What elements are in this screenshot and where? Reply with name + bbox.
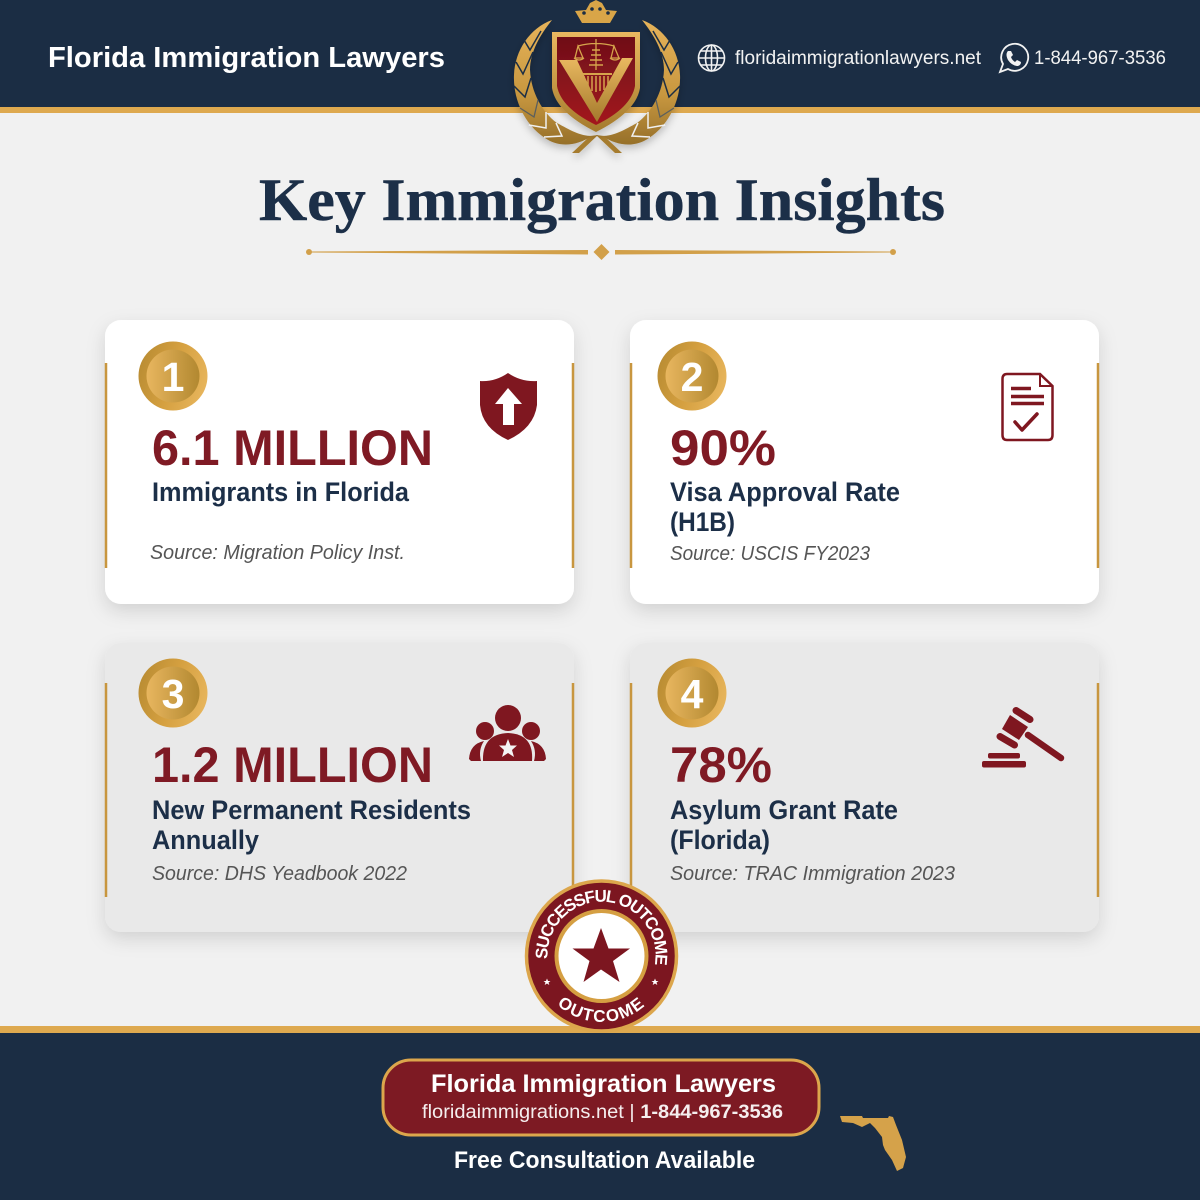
free consultation: Free Consultation Available: [454, 1147, 755, 1174]
label: (H1B): [670, 507, 735, 537]
icon: people with star: [469, 705, 546, 761]
footer bar: [0, 1026, 1200, 1200]
label: [152, 795, 471, 855]
arc text bottom: OUTCOME: [559, 997, 644, 1022]
label: Visa Approval Rate: [670, 477, 900, 507]
star: [572, 928, 630, 982]
medal 3: [138, 658, 208, 728]
label: (Florida): [670, 825, 770, 855]
crown: [575, 0, 617, 23]
panel: card 4 asylum grant: [630, 643, 1099, 932]
crest logo: [514, 0, 680, 153]
arc text top: SUCCESSFUL OUTCOME: [536, 890, 668, 965]
title: Key Immigration Insights: [259, 167, 945, 233]
icon: phone chat: [1000, 44, 1028, 72]
stat 78%: 78%: [670, 737, 772, 793]
phone number: 1-844-967-3536: [1034, 47, 1166, 69]
panel: card 1 immigrants: [105, 320, 574, 604]
source: Source: Migration Policy Inst.: [150, 542, 405, 564]
stat 6.1 million: 6.1 MILLION: [152, 420, 433, 476]
small stars: [544, 978, 658, 985]
medal 4: 4: [681, 671, 704, 717]
source: Source: TRAC Immigration 2023: [670, 863, 955, 885]
panel: card 2 visa approval: [630, 320, 1099, 604]
medal 1: [138, 342, 208, 410]
medal 1: 1: [162, 354, 184, 400]
scales and column: [574, 39, 620, 92]
label: Annually: [152, 825, 259, 855]
badge: successful outcome: [524, 879, 678, 1030]
stat 1.2 million: 1.2 MILLION: [152, 737, 433, 793]
icon: globe: [698, 45, 724, 71]
icon: shield with arrow: [480, 373, 537, 440]
icon: document with check: [1002, 374, 1052, 440]
pill firm name: Florida Immigration Lawyers: [431, 1070, 776, 1098]
panel: card 3 permanent residents: [105, 643, 574, 932]
pill contact line: floridaimmigrations.net | 1-844-967-3536: [422, 1102, 783, 1123]
source: Source: USCIS FY2023: [670, 543, 870, 565]
medal 4: [658, 658, 726, 728]
laurel wreath: [514, 20, 680, 153]
icon: gavel: [982, 710, 1061, 768]
icon: Florida map: [840, 1116, 906, 1171]
medal 2: 2: [681, 354, 703, 400]
header bar: [0, 0, 1200, 113]
stat 90%: 90%: [670, 420, 776, 476]
source: Source: DHS Yeadbook 2022: [152, 863, 407, 885]
chevron V: [559, 58, 633, 122]
footer contact pill: [383, 1060, 819, 1135]
label: [670, 795, 898, 855]
header firm name: Florida Immigration Lawyers: [48, 42, 445, 74]
label: [670, 477, 900, 537]
shield: [552, 32, 640, 132]
label: Asylum Grant Rate: [670, 795, 898, 825]
label: New Permanent Residents: [152, 795, 471, 825]
medal 3: 3: [162, 671, 184, 717]
medal 2: [658, 342, 726, 410]
label: Immigrants in Florida: [152, 477, 410, 507]
website: floridaimmigrationlawyers.net: [735, 48, 982, 69]
title divider: [306, 244, 896, 260]
